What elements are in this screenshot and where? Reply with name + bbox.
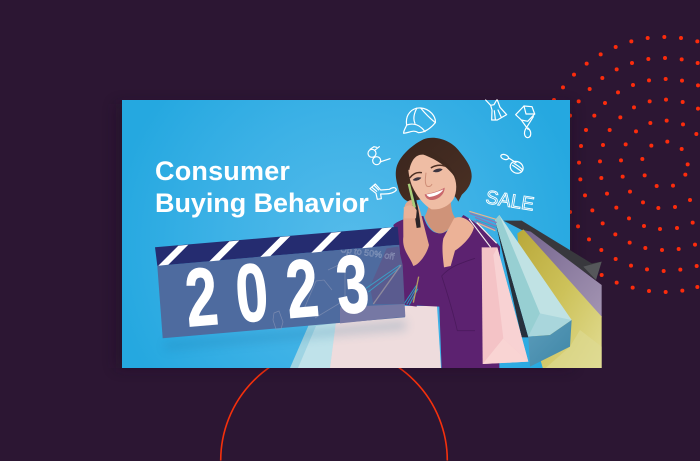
teal bag shaded side — [495, 215, 540, 337]
black bag — [503, 221, 602, 280]
bag handle tan — [413, 277, 419, 303]
purple bag — [523, 230, 602, 317]
title: Buying Behavior — [155, 188, 369, 218]
bag handles right — [470, 213, 497, 229]
phone — [412, 192, 421, 228]
teal handle accent — [476, 220, 496, 227]
icon: sale lettering: SALE — [484, 187, 535, 216]
icon: glasses — [368, 147, 390, 165]
icon: shoe — [370, 184, 396, 199]
light blue front bag — [290, 323, 336, 368]
light blue bag highlight — [298, 323, 336, 368]
yellow bag bottom — [543, 330, 602, 370]
sleeve crease — [442, 258, 475, 331]
icon: brush — [500, 153, 525, 176]
brows — [410, 165, 445, 178]
banner body — [157, 245, 405, 338]
fingers over phone — [404, 205, 417, 218]
faint bag outline — [301, 262, 345, 318]
see-through bag and sleeve shapes — [340, 247, 405, 323]
infographic canvas — [122, 35, 700, 460]
icon: handbag — [516, 106, 535, 138]
face — [408, 154, 456, 209]
dark gap — [495, 220, 528, 337]
teal bag base — [528, 320, 572, 367]
sweater seen through banner — [370, 247, 405, 304]
year: 2023 — [182, 236, 391, 344]
banner: 2023 clapper board — [155, 227, 405, 344]
woman and bags illustration — [393, 138, 602, 370]
phone edge — [408, 184, 416, 208]
icon: cap — [404, 108, 435, 133]
handle accents — [469, 211, 496, 231]
right hand — [442, 217, 474, 267]
yellow bag — [517, 229, 602, 370]
nose shade — [425, 173, 432, 187]
red dot pattern — [552, 35, 700, 294]
bag handles left — [404, 285, 418, 305]
icons: white line drawings of fashion items — [368, 100, 535, 199]
head — [396, 138, 472, 209]
white handles — [469, 219, 497, 247]
lower sleeve — [404, 304, 417, 307]
photo panel — [116, 100, 572, 368]
dark stripe band — [155, 227, 399, 266]
black bag tip — [583, 262, 602, 280]
teal handles through banner — [366, 265, 401, 292]
red circle outline — [221, 347, 447, 460]
pink bag panel — [493, 247, 528, 362]
teal bag fold — [528, 313, 572, 337]
eyes — [413, 169, 443, 181]
icon: dress — [486, 100, 507, 120]
banner shadow — [165, 320, 406, 350]
teeth — [426, 189, 443, 197]
front shopping bags — [290, 306, 441, 368]
faint shoe outline — [273, 311, 283, 329]
teal bag — [495, 215, 572, 337]
title: Consumer — [155, 156, 290, 186]
left hand and forearm — [403, 200, 429, 266]
hair back — [396, 138, 472, 202]
pink bag fold — [483, 338, 528, 364]
pale bag seen through banner — [340, 304, 405, 323]
pale pink front bag — [330, 306, 441, 368]
white diagonal stripes — [158, 227, 392, 266]
faint sale text: Up to 50% off — [340, 244, 395, 262]
smile — [425, 188, 445, 200]
grey handle through banner — [373, 265, 401, 304]
hair fringe — [408, 154, 454, 176]
sweater — [393, 215, 500, 370]
pink side bag — [482, 247, 528, 364]
neck — [424, 202, 455, 234]
